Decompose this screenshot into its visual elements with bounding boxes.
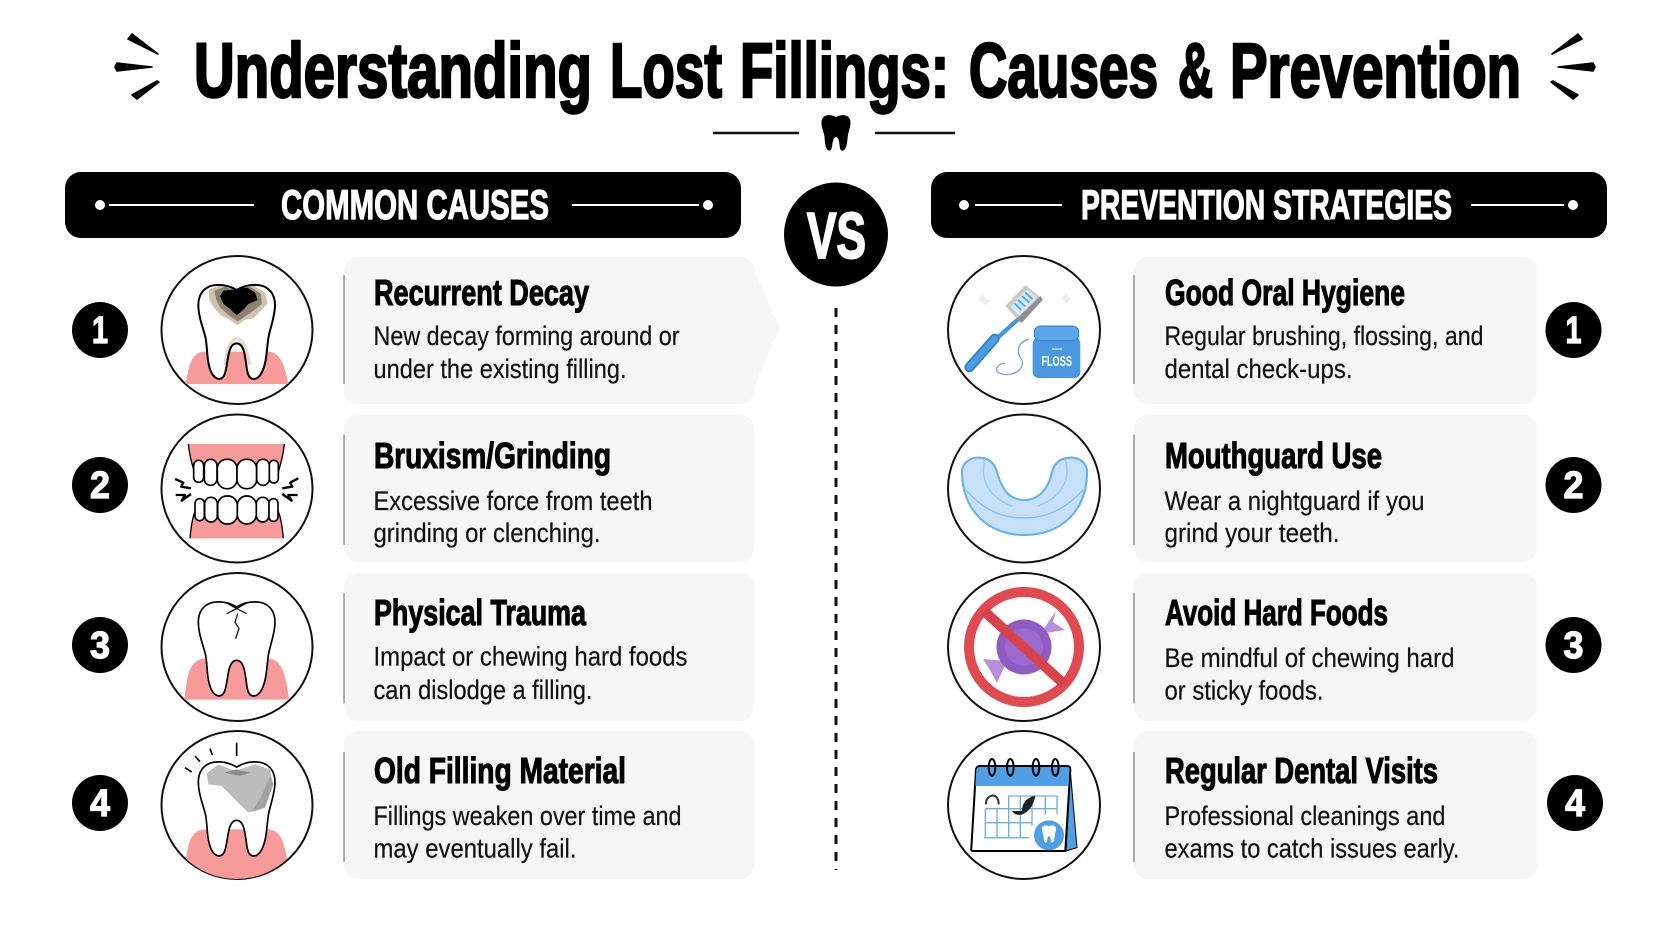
card: can dislodge a filling.	[374, 675, 592, 705]
heading text: &	[1178, 28, 1213, 114]
panel: prevention strategies	[931, 172, 1607, 879]
card: Mouthguard Use	[1165, 435, 1382, 476]
icon: left sparkle	[115, 34, 159, 99]
VS badge	[784, 182, 888, 286]
header: prevention strategies: PREVENTION STRATEGIES	[1081, 181, 1452, 228]
header: common causes	[65, 172, 741, 238]
icon: decayed tooth	[162, 256, 312, 404]
card: Avoid Hard Foods	[1165, 592, 1388, 633]
card: Old Filling Material	[374, 750, 626, 791]
card	[344, 414, 754, 562]
strategy 1: good oral hygiene	[948, 256, 1602, 404]
icon: cracked tooth	[162, 573, 312, 721]
center dashed divider	[834, 308, 838, 870]
header: common causes: COMMON CAUSES	[281, 181, 549, 228]
card: Recurrent Decay	[374, 272, 589, 313]
number badge 4	[72, 775, 128, 831]
panel: common causes	[65, 172, 780, 883]
card: exams to catch issues early.	[1164, 834, 1460, 864]
number badge 3	[1546, 617, 1602, 673]
card: Excessive force from teeth	[374, 486, 652, 516]
strategy 4: regular dental visits	[948, 731, 1603, 879]
strategy 3: avoid hard foods	[948, 573, 1602, 721]
icon: toothbrush and floss	[948, 256, 1100, 404]
number badge 1	[72, 302, 128, 358]
card: under the existing filling.	[374, 354, 626, 384]
icon: right sparkle	[1551, 34, 1595, 99]
heading text: Understanding	[194, 28, 592, 114]
card: Impact or chewing hard foods	[374, 642, 688, 672]
card	[344, 731, 754, 879]
number badge 1: 1	[92, 310, 108, 352]
icon: mouthguard	[948, 414, 1100, 562]
number badge 3: 3	[90, 625, 110, 667]
card: may eventually fail.	[374, 834, 576, 864]
number badge 3: 3	[1564, 625, 1584, 667]
card: New decay forming around or	[374, 321, 680, 351]
number badge 4	[1547, 775, 1603, 831]
card: Professional cleanings and	[1164, 801, 1446, 831]
heading text	[194, 28, 1521, 114]
card: Bruxism/Grinding	[374, 435, 611, 476]
VS badge: VS	[807, 199, 866, 272]
cause 3: physical trauma	[72, 573, 754, 721]
cause 2: bruxism	[72, 414, 754, 562]
number badge 3	[72, 617, 128, 673]
number badge 2	[1546, 457, 1602, 513]
number badge 4: 4	[90, 783, 110, 825]
card: Wear a nightguard if you	[1164, 486, 1424, 516]
card	[1134, 731, 1537, 879]
heading text: Lost	[610, 28, 722, 114]
icon: toothbrush and floss: FLOSS	[1041, 354, 1072, 370]
heading text: Prevention	[1230, 28, 1521, 114]
number badge 2: 2	[90, 465, 110, 507]
number badge 2: 2	[1564, 465, 1584, 507]
icon: calendar	[948, 731, 1100, 879]
heading text: Fillings:	[740, 28, 949, 114]
card: Good Oral Hygiene	[1165, 272, 1405, 313]
card: grinding or clenching.	[374, 518, 600, 548]
icon: worn filling tooth	[162, 731, 312, 883]
card	[344, 573, 754, 721]
card	[1134, 414, 1537, 562]
number badge 4: 4	[1565, 783, 1585, 825]
card: dental check-ups.	[1164, 354, 1352, 384]
card: or sticky foods.	[1164, 676, 1324, 706]
card: grind your teeth.	[1164, 518, 1340, 548]
header: prevention strategies	[931, 172, 1607, 238]
icon: no candy	[948, 573, 1100, 721]
strategy 2: mouthguard	[948, 414, 1602, 562]
title divider with tooth	[713, 115, 955, 151]
number badge 1	[1546, 302, 1602, 358]
card: Regular Dental Visits	[1165, 750, 1438, 791]
card	[1134, 573, 1537, 721]
title	[115, 28, 1595, 114]
card	[1134, 257, 1537, 404]
icon: grinding teeth	[162, 414, 312, 562]
card	[344, 257, 780, 404]
cause 1: recurrent decay	[72, 256, 780, 404]
heading text: Causes	[969, 28, 1158, 114]
number badge 1: 1	[1566, 310, 1582, 352]
card: Regular brushing, flossing, and	[1164, 321, 1484, 351]
card: Be mindful of chewing hard	[1164, 643, 1454, 673]
card: Fillings weaken over time and	[374, 801, 682, 831]
cause 4: old filling	[72, 731, 754, 883]
number badge 2	[72, 457, 128, 513]
card: Physical Trauma	[374, 592, 587, 633]
